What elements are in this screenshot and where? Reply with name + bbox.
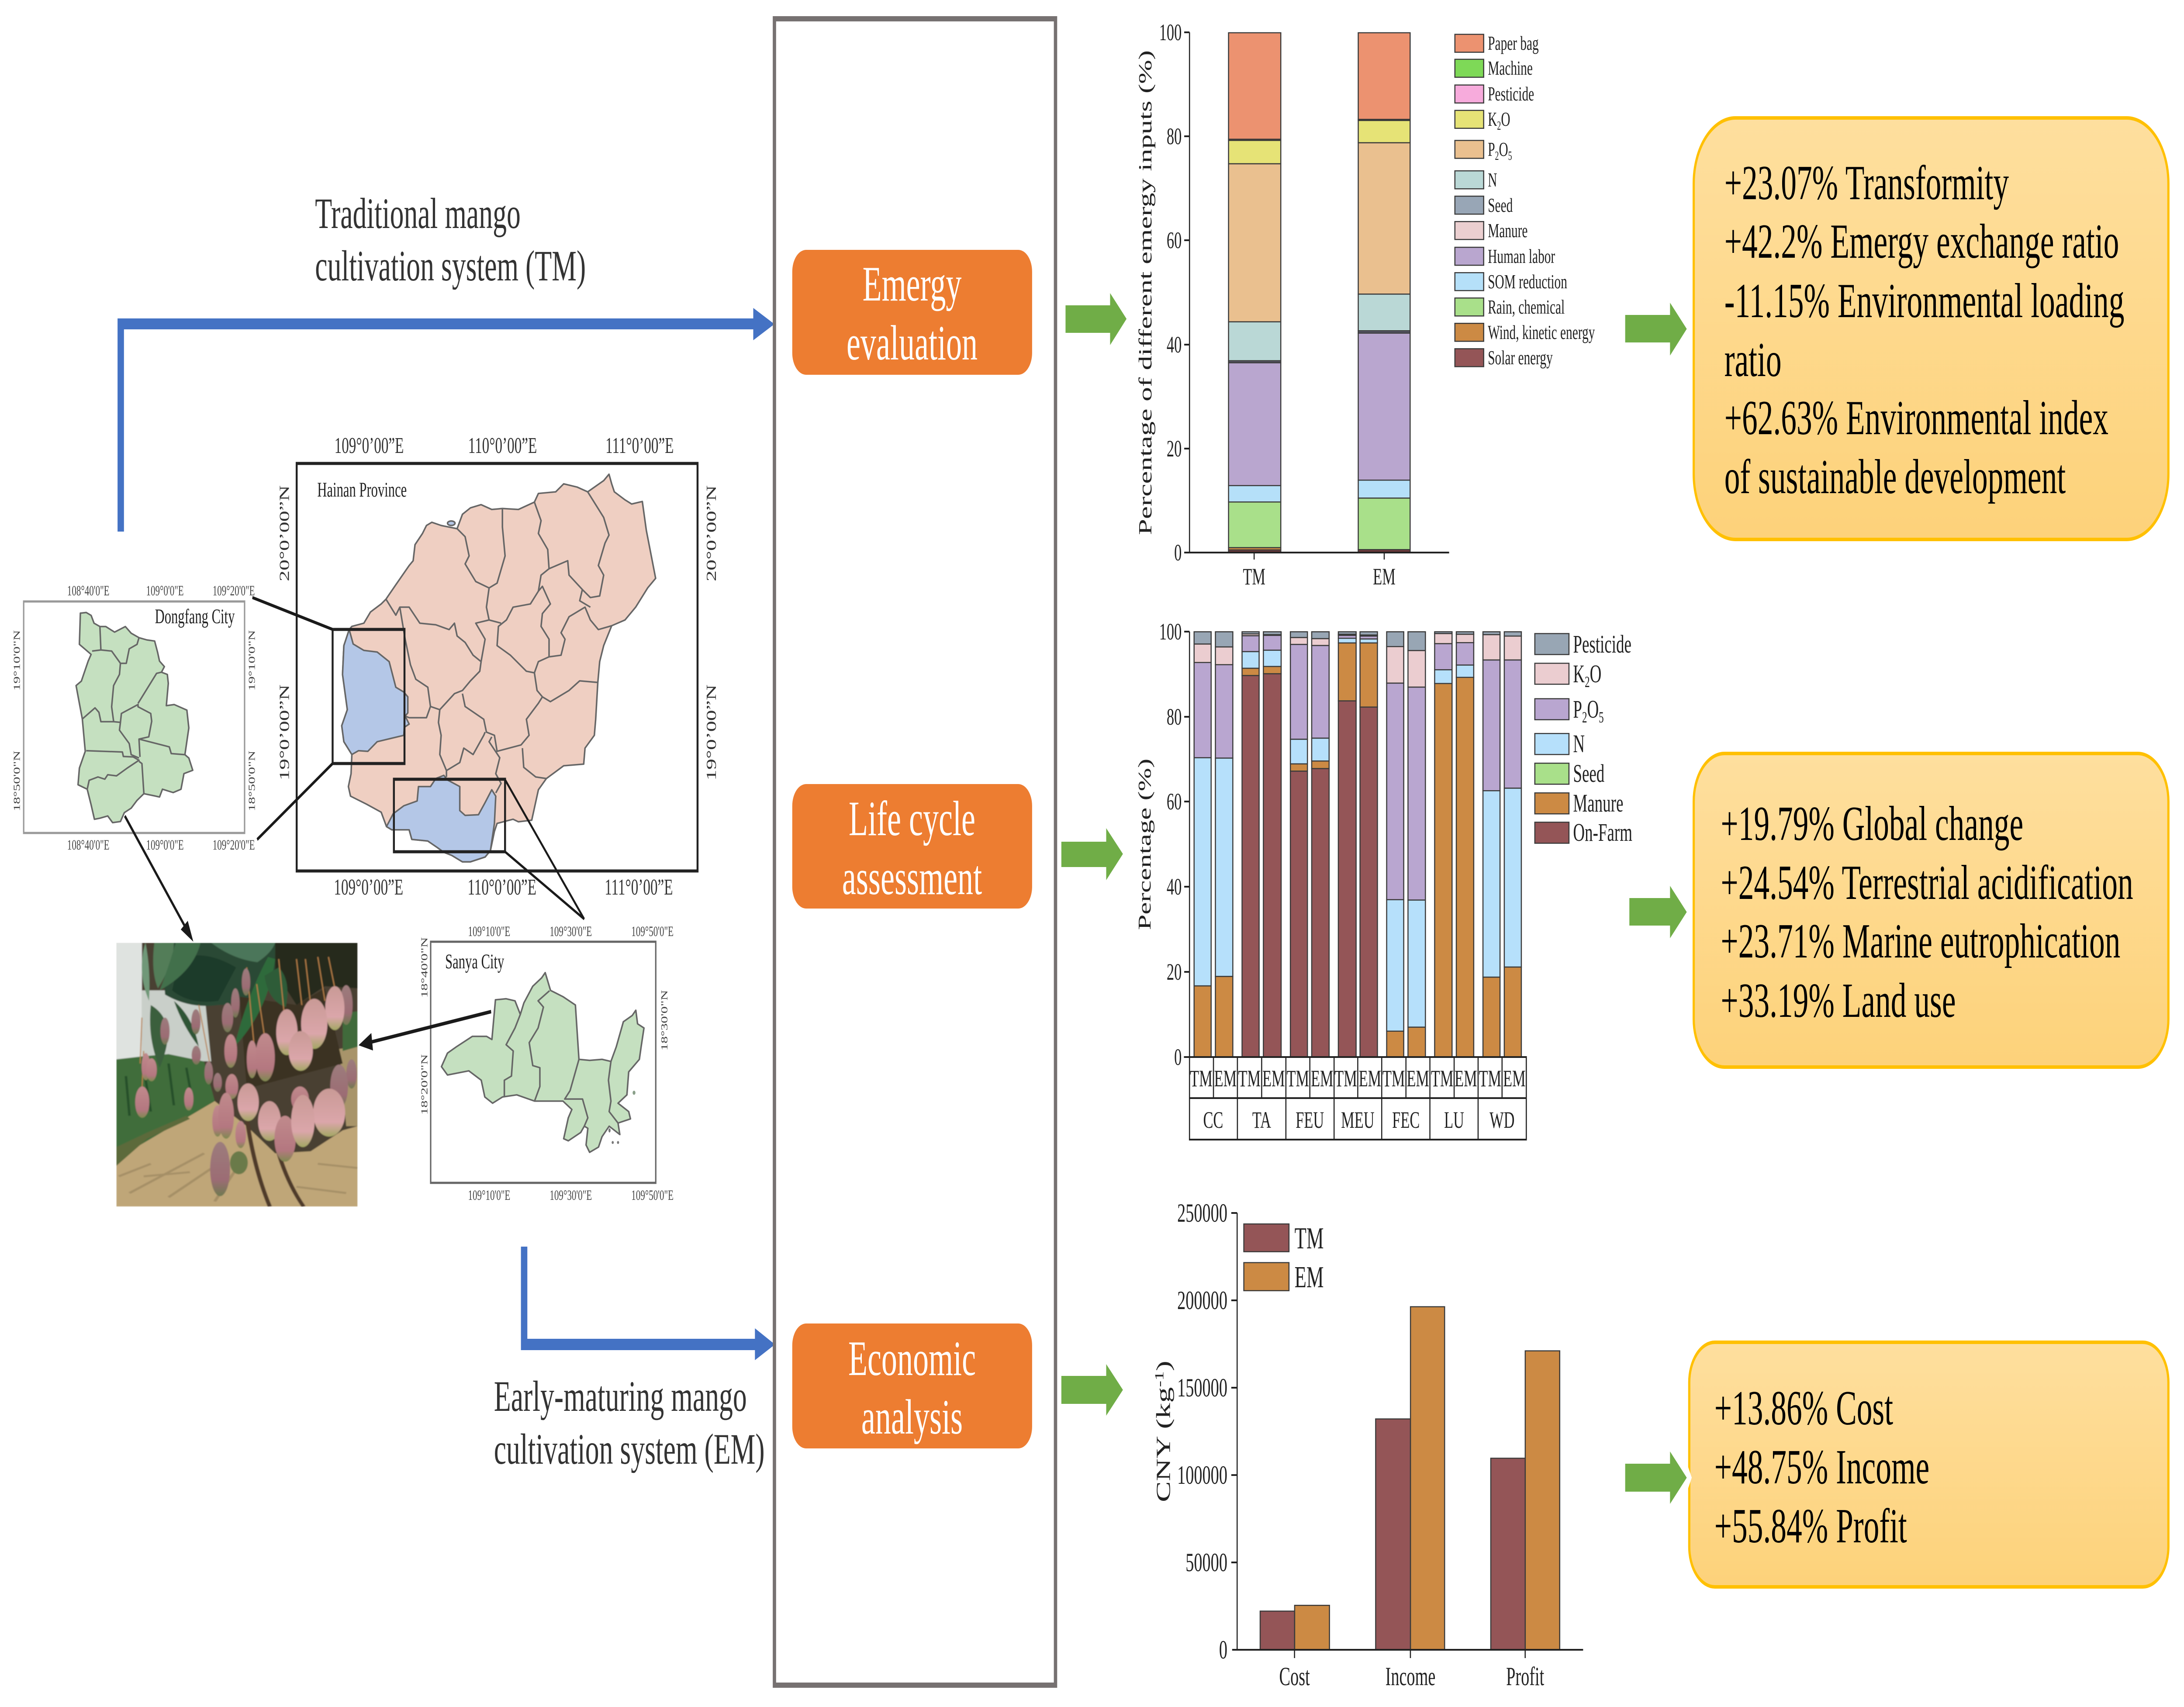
coordinate labels: Dongfang map: 109°0'0"E <box>146 582 184 598</box>
coordinate labels: Hainan map: 20°0’00”N <box>277 485 292 581</box>
table labels: systems and impact categories: LU <box>1444 1107 1464 1133</box>
legend: emergy inputs: Pesticide <box>1488 83 1534 105</box>
legend: emergy inputs: 5 <box>1508 149 1512 163</box>
arrow: life cycle chart to results <box>1629 886 1687 938</box>
callout: life cycle results: +24.54% Terrestrial acidification <box>1721 856 2133 910</box>
method: emergy evaluation <box>792 250 1032 375</box>
legend: life cycle contributors: 2 <box>1585 673 1590 691</box>
legend: emergy inputs: 2 <box>1497 119 1501 133</box>
callout: life cycle results <box>1694 753 2168 1067</box>
legend: life cycle contributors: Seed <box>1573 760 1604 788</box>
coordinate labels: Dongfang map: 109°0'0"E <box>146 836 184 853</box>
legend: life cycle contributors: N <box>1573 730 1585 758</box>
legend: emergy inputs: Seed <box>1488 195 1513 217</box>
arrow: Dongfang map to photo <box>125 816 194 942</box>
legend: life cycle contributors: O <box>1587 695 1599 723</box>
arrow: emergy chart to results <box>1625 303 1687 356</box>
label: early-maturing mango cultivation system: Early-maturing mango <box>494 1372 747 1421</box>
coordinate labels: Hainan map: 110°0’00”E <box>467 875 536 900</box>
label: traditional mango cultivation system: Traditional mango <box>315 190 521 238</box>
table labels: systems and impact categories: MEU <box>1341 1107 1375 1133</box>
legend: emergy inputs: O <box>1501 109 1510 131</box>
table labels: systems and impact categories: EM <box>1311 1065 1334 1092</box>
method: economic analysis: analysis <box>861 1390 963 1444</box>
axis labels: life cycle chart: 0 <box>1174 1044 1182 1070</box>
callout: emergy results: +23.07% Transformity <box>1724 156 2009 210</box>
callout: emergy results: of sustainable development <box>1724 450 2066 504</box>
coordinate labels: Hainan map: 19°0’00”N <box>704 684 719 781</box>
axes and table grid: life cycle chart <box>1184 632 1526 1140</box>
axes: emergy chart <box>1184 32 1449 560</box>
axis labels: emergy chart: 60 <box>1167 227 1182 253</box>
legend: emergy inputs: 2 <box>1495 149 1499 163</box>
axis labels: economic chart: Profit <box>1506 1662 1544 1691</box>
highlight box: Dongfang area <box>332 629 404 764</box>
axis labels: economic chart: -1 <box>1152 1371 1166 1387</box>
coordinate labels: Hainan map <box>277 433 719 900</box>
axis labels: life cycle chart: 20 <box>1167 959 1182 985</box>
axis labels: economic chart: 0 <box>1219 1635 1227 1664</box>
coordinate labels: Sanya map: 18°40'0"N <box>419 937 429 998</box>
axis labels: life cycle chart: 40 <box>1167 874 1182 900</box>
legend: emergy inputs: Manure <box>1488 220 1527 242</box>
axis labels: economic chart: 200000 <box>1177 1285 1227 1315</box>
callout: life cycle results: +33.19% Land use <box>1721 974 1956 1028</box>
coordinate labels: Sanya map: 109°30'0"E <box>549 923 592 939</box>
table labels: systems and impact categories: EM <box>1503 1065 1526 1092</box>
frame: Dongfang map <box>24 601 245 833</box>
coordinate labels: Dongfang map: 18°50'0"N <box>11 751 22 811</box>
panel frame <box>774 19 1055 1685</box>
legend: TM and EM: EM <box>1295 1260 1324 1294</box>
callout: emergy results: +62.63% Environmental index <box>1724 391 2108 445</box>
legend: emergy inputs: Machine <box>1488 58 1533 79</box>
coordinate labels: Sanya map: 109°10'0"E <box>468 923 510 939</box>
connector: Dongfang map to Hainan box (bottom) <box>257 764 332 840</box>
table labels: systems and impact categories: TM <box>1190 1065 1213 1092</box>
callout: life cycle results: +23.71% Marine eutrophication <box>1721 914 2120 968</box>
legend: emergy inputs: Rain, chemical <box>1488 297 1565 318</box>
axis labels: economic chart <box>1152 1198 1544 1691</box>
method: life cycle assessment: assessment <box>842 851 982 905</box>
coordinate labels: Hainan map: 19°0’00”N <box>277 684 292 781</box>
frame and title: Hainan Province: Hainan Province <box>317 478 407 501</box>
legend: life cycle contributors: P <box>1573 695 1582 723</box>
callout: economic results: +48.75% Income <box>1714 1440 1929 1494</box>
legend: TM and EM <box>1244 1221 1324 1294</box>
axis labels: emergy chart: 100 <box>1159 19 1182 45</box>
method: economic analysis <box>792 1323 1032 1448</box>
axis labels: emergy chart: EM <box>1373 563 1396 590</box>
coordinate labels: Dongfang map: 108°40'0"E <box>67 582 110 598</box>
axis labels: life cycle chart: Percentage (%) <box>1134 759 1154 930</box>
photo: mangoes hanging in orchard <box>116 943 358 1206</box>
coordinate labels: Hainan map: 111°0’00”E <box>605 875 673 900</box>
callout: emergy results <box>1694 118 2168 539</box>
axis labels: emergy chart: 20 <box>1167 435 1182 462</box>
table labels: systems and impact categories: EM <box>1214 1065 1237 1092</box>
table labels: systems and impact categories: WD <box>1489 1107 1514 1133</box>
frame and title: Hainan Province <box>297 463 698 871</box>
map: Sanya City <box>419 923 674 1203</box>
table labels: systems and impact categories: EM <box>1359 1065 1381 1092</box>
legend: life cycle contributors: Pesticide <box>1573 630 1631 658</box>
coordinate labels: Hainan map: 109°0’00”E <box>335 433 404 458</box>
coordinate labels: Dongfang map: 109°20'0"E <box>213 836 255 853</box>
coordinate labels: Dongfang map: 109°20'0"E <box>213 582 255 598</box>
legend: TM and EM: TM <box>1295 1221 1324 1255</box>
legend: emergy inputs <box>1455 33 1595 369</box>
map shapes: Sanya districts <box>442 973 644 1152</box>
coordinate labels: Hainan map: 109°0’00”E <box>334 875 403 900</box>
callout: life cycle results: +19.79% Global change <box>1721 797 2023 851</box>
coordinate labels: Sanya map <box>419 923 674 1203</box>
arrow: EM system to evaluation panel <box>521 1247 775 1360</box>
coordinate labels: Sanya map: 109°50'0"E <box>631 923 674 939</box>
axis labels: life cycle chart: 60 <box>1167 788 1182 815</box>
table labels: systems and impact categories: FEU <box>1296 1107 1324 1133</box>
arrow: emergy evaluation to chart <box>1065 293 1127 345</box>
map: Hainan Province <box>277 433 719 900</box>
coordinate labels: Sanya map: 109°10'0"E <box>468 1187 510 1203</box>
axis labels: emergy chart: TM <box>1243 563 1265 590</box>
callout: economic results: +55.84% Profit <box>1714 1499 1907 1553</box>
legend: emergy inputs: Solar energy <box>1488 347 1553 369</box>
bars: TM and EM emergy shares <box>1229 33 1410 552</box>
label: traditional mango cultivation system: cultivation system (TM) <box>315 242 586 290</box>
legend: emergy inputs: N <box>1488 169 1497 191</box>
axis labels: economic chart: Cost <box>1279 1662 1310 1691</box>
title: Dongfang City: Dongfang City <box>155 605 235 628</box>
legend: emergy inputs: Paper bag <box>1488 33 1539 55</box>
table labels: systems and impact categories: TM <box>1479 1065 1501 1092</box>
chart: life cycle assessment stacked bars <box>1134 619 1632 1140</box>
map shapes: Dongfang townships <box>76 612 193 822</box>
callout: emergy results: -11.15% Environmental loading <box>1724 274 2124 328</box>
method: economic analysis: Economic <box>848 1332 976 1386</box>
legend: life cycle contributors: 2 <box>1582 708 1587 726</box>
axis labels: economic chart: 150000 <box>1177 1373 1227 1402</box>
legend: life cycle contributors: K <box>1573 660 1585 688</box>
map shapes: Hainan counties <box>342 474 656 862</box>
arrow: TM system to evaluation panel <box>117 308 774 532</box>
legend: emergy inputs: Wind, kinetic energy <box>1488 322 1595 344</box>
axis labels: emergy chart: 40 <box>1167 332 1182 358</box>
coordinate labels: Hainan map: 110°0’00”E <box>468 433 537 458</box>
connector: Dongfang map to Hainan box (top) <box>252 598 332 629</box>
callout: emergy results: ratio <box>1724 333 1782 387</box>
axis labels: economic chart: 250000 <box>1177 1198 1227 1227</box>
table labels: systems and impact categories: TM <box>1431 1065 1453 1092</box>
coordinate labels: Dongfang map: 19°10'0"N <box>11 630 22 691</box>
label: early-maturing mango cultivation system: cultivation system (EM) <box>494 1425 765 1474</box>
connector: Sanya box to Sanya map <box>505 780 584 919</box>
chart: emergy inputs stacked bars <box>1135 19 1595 590</box>
coordinate labels: Dongfang map: 19°10'0"N <box>247 630 257 691</box>
method: emergy evaluation: Emergy <box>863 257 961 311</box>
map: Dongfang City <box>11 582 257 853</box>
table labels: systems and impact categories: EM <box>1406 1065 1429 1092</box>
axis labels: life cycle chart: 80 <box>1167 704 1182 730</box>
chart: economic analysis grouped bars <box>1152 1198 1583 1691</box>
table labels: systems and impact categories: EM <box>1262 1065 1285 1092</box>
method: emergy evaluation: evaluation <box>847 316 978 370</box>
legend: life cycle contributors: On-Farm <box>1573 819 1632 847</box>
callout: economic results <box>1689 1342 2168 1587</box>
coordinate labels: Sanya map: 18°30'0"N <box>659 990 670 1050</box>
coordinate labels: Hainan map: 20°0’00”N <box>704 485 719 581</box>
bars: impact category contributions <box>1194 632 1521 1057</box>
table labels: systems and impact categories: EM <box>1455 1065 1477 1092</box>
axis labels: economic chart: 50000 <box>1185 1548 1227 1577</box>
highlight box: Sanya area <box>394 779 505 852</box>
axis labels: economic chart: CNY (kg <box>1152 1387 1175 1502</box>
bars: cost, income and profit <box>1260 1307 1560 1650</box>
callout: emergy results: +42.2% Emergy exchange ratio <box>1724 214 2119 269</box>
coordinate labels: Sanya map: 109°30'0"E <box>549 1187 592 1203</box>
table labels: systems and impact categories: CC <box>1203 1107 1223 1133</box>
axes: economic chart <box>1231 1213 1583 1658</box>
legend: life cycle contributors: Manure <box>1573 789 1623 817</box>
table labels: systems and impact categories: TM <box>1286 1065 1309 1092</box>
table labels: systems and impact categories: TA <box>1252 1107 1271 1133</box>
legend: life cycle contributors <box>1535 630 1632 847</box>
legend: emergy inputs: K <box>1488 109 1497 131</box>
coordinate labels: Hainan map: 111°0’00”E <box>605 433 674 458</box>
legend: life cycle contributors: 5 <box>1599 708 1604 726</box>
axis labels: emergy chart: 0 <box>1174 539 1182 566</box>
axis labels: economic chart: Income <box>1386 1662 1435 1691</box>
coordinate labels: Sanya map: 18°20'0"N <box>419 1054 429 1115</box>
method: life cycle assessment <box>792 784 1032 909</box>
arrow: economic chart to results <box>1625 1451 1692 1504</box>
arrow: life cycle assessment to chart <box>1061 828 1123 880</box>
title: Sanya City: Sanya City <box>445 950 504 973</box>
axis labels: emergy chart: 80 <box>1167 123 1182 149</box>
callout: economic results: +13.86% Cost <box>1714 1381 1893 1435</box>
panel: evaluation methods <box>774 19 1055 1685</box>
table labels: systems and impact categories: TM <box>1238 1065 1261 1092</box>
axis labels: economic chart: 100000 <box>1177 1460 1227 1489</box>
table labels: systems and impact categories: TM <box>1334 1065 1357 1092</box>
arrow: Sanya map to photo <box>359 1012 491 1050</box>
axis labels: emergy chart: Percentage of different emergy inputs (%) <box>1135 50 1155 535</box>
method: life cycle assessment: Life cycle <box>849 792 975 846</box>
table labels: systems and impact categories: FEC <box>1392 1107 1420 1133</box>
legend: emergy inputs: O <box>1499 139 1508 161</box>
axis labels: life cycle chart: 100 <box>1159 619 1182 645</box>
table labels: systems and impact categories <box>1190 1065 1526 1133</box>
frame: Sanya map <box>431 942 656 1183</box>
axis labels: emergy chart <box>1135 19 1396 590</box>
legend: emergy inputs: Human labor <box>1488 246 1555 268</box>
axis labels: economic chart: ) <box>1152 1361 1175 1371</box>
axis labels: life cycle chart <box>1134 619 1182 1070</box>
legend: emergy inputs: P <box>1488 139 1495 161</box>
legend: life cycle contributors: O <box>1590 660 1601 688</box>
coordinate labels: Sanya map: 109°50'0"E <box>631 1187 674 1203</box>
table labels: systems and impact categories: TM <box>1382 1065 1405 1092</box>
arrow: economic analysis to chart <box>1061 1364 1123 1416</box>
legend: emergy inputs: SOM reduction <box>1488 271 1567 293</box>
coordinate labels: Dongfang map: 108°40'0"E <box>67 836 110 853</box>
coordinate labels: Dongfang map <box>11 582 257 853</box>
coordinate labels: Dongfang map: 18°50'0"N <box>247 751 257 811</box>
